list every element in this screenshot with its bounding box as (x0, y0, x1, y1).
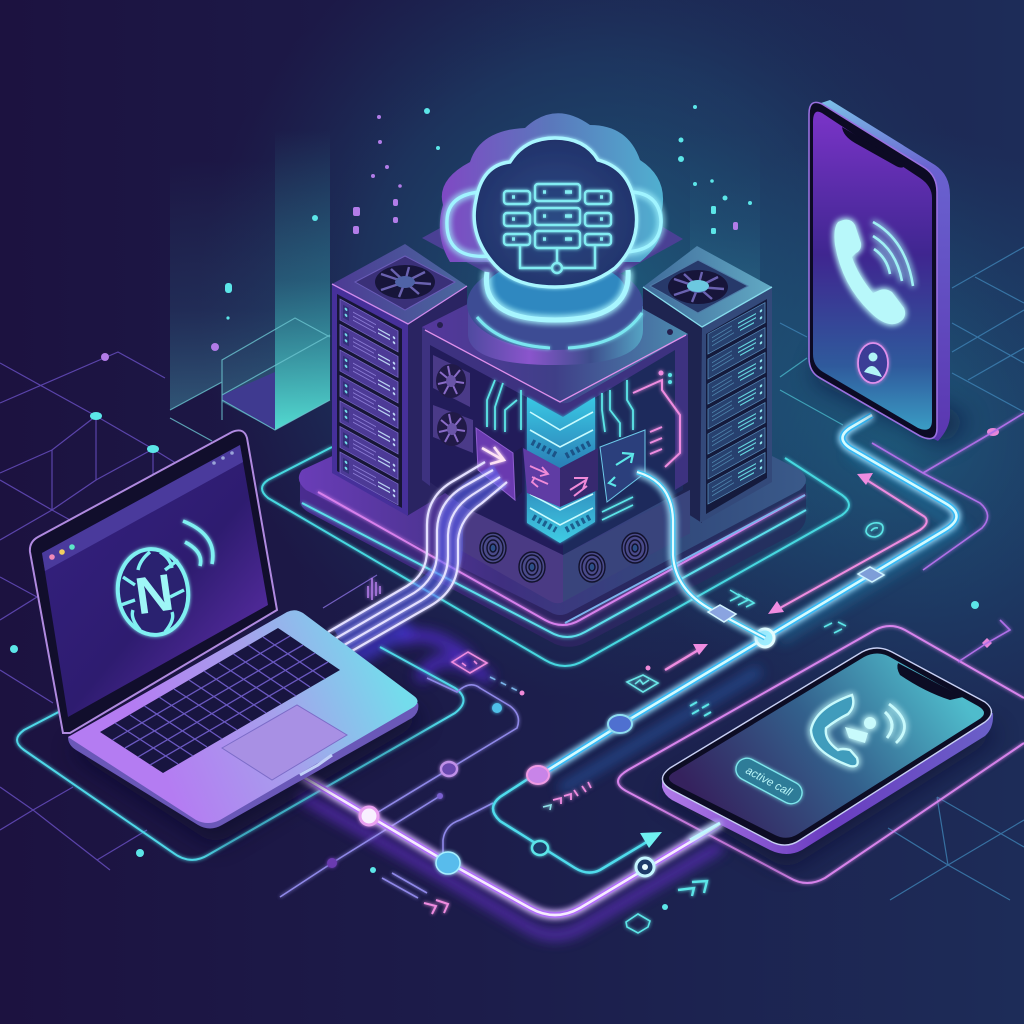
laptop (30, 430, 425, 845)
phone body (809, 102, 937, 439)
top face (422, 260, 688, 403)
phone shadow (662, 670, 1000, 870)
pink arrow head: lower (768, 601, 784, 614)
small floor icons (368, 523, 883, 933)
laptop area outline (17, 647, 464, 860)
router: right module (600, 430, 645, 502)
fan: right tower (650, 260, 748, 313)
left server tower (332, 244, 467, 516)
phone notch (897, 663, 963, 700)
inner loop arrow head (640, 832, 662, 848)
laptop lid (30, 430, 277, 733)
server network glyph (504, 184, 611, 273)
right server tower (643, 246, 772, 523)
phone screen (669, 654, 984, 838)
block walls (427, 340, 563, 555)
upper phone (809, 100, 970, 445)
globe logo with N (112, 521, 213, 639)
handset icon (811, 695, 905, 766)
keyboard (100, 628, 340, 773)
active call pill (732, 754, 806, 808)
main route: upper phone to network hub (540, 415, 956, 775)
phone connector glow (690, 823, 720, 840)
right side pink route (872, 413, 1024, 662)
route nodes (327, 567, 884, 876)
fan: left tower (355, 256, 455, 310)
multi-line data bus: laptop to server (328, 462, 507, 655)
central server block (422, 260, 690, 603)
pink arrow head: upper (857, 473, 873, 485)
pink route arrows (780, 477, 927, 608)
inner loop route with arrow (493, 773, 650, 873)
floating data particles (10, 105, 999, 910)
rack units: right tower (708, 303, 765, 504)
phone notch (842, 127, 905, 168)
trackpad (222, 705, 347, 780)
inner laptop trace (280, 678, 518, 897)
phone body (662, 713, 993, 854)
pink arrow head: center (693, 644, 708, 655)
phone side edge (815, 100, 950, 441)
signal routers (476, 428, 645, 507)
laptop base (68, 610, 418, 828)
wall fans (433, 355, 473, 453)
cloud 3D back (440, 113, 663, 262)
rack units: left tower (340, 299, 398, 505)
platform outer neon outline (262, 447, 849, 666)
glowing memory column (527, 397, 595, 543)
active call pill: active call (743, 765, 794, 799)
laptop shadow (70, 640, 425, 845)
router: left module (476, 428, 522, 500)
phone screen (813, 112, 932, 430)
circuit traces (487, 370, 680, 520)
lower main route: laptop to active phone (300, 775, 722, 915)
phone pink outline (618, 626, 1024, 883)
cloud pedestal (467, 258, 643, 365)
server platform (299, 420, 806, 647)
cyan link: server to main route (637, 472, 765, 638)
cloud icon (440, 113, 663, 287)
neon circuit paths on the floor (17, 413, 1024, 914)
background network grid lines (0, 247, 1024, 900)
phone shadow (812, 340, 970, 445)
lower phone (662, 648, 1000, 870)
floor reflections (300, 450, 960, 935)
inline connector (708, 605, 736, 622)
globe logo with N: N (132, 564, 177, 626)
cloud neon outline (447, 192, 661, 256)
router: middle module (523, 448, 598, 507)
translucent teal glass panels (170, 130, 760, 441)
lower base with fans (460, 490, 690, 603)
cloud face (474, 138, 637, 287)
handset icon (834, 220, 913, 324)
rear slab behind the cloud (422, 195, 683, 310)
contact button (858, 343, 888, 383)
